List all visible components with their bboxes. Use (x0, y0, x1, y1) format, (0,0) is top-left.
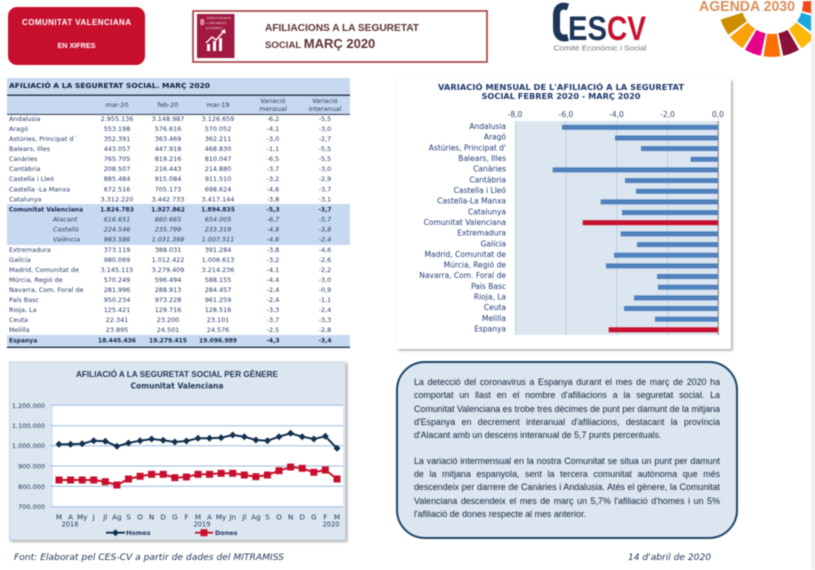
row: Castella i Lleó: 911.510 (205, 175, 231, 183)
row: Astúries: 352.391 (104, 135, 130, 143)
category labels: Galícia (481, 239, 506, 248)
row: Aragó: 570.052 (205, 125, 231, 133)
commentary paragraph 2: La variació intermensual en la nostra Comunitat se situa un punt per damunt (414, 456, 720, 466)
row: Castelló (53, 226, 331, 234)
row: Canàries: 810.047 (205, 155, 231, 163)
row: València: 983.586 (104, 236, 130, 244)
row: Melilla: 24.501 (157, 326, 179, 334)
axis labels: -6,0 (559, 110, 574, 119)
x axis labels: D (299, 512, 305, 522)
row: País Basc: 950.234 (104, 296, 130, 304)
row: Espanya: -4,3 (266, 338, 280, 344)
row: Navarra: Navarra, Com. Foral de (9, 286, 83, 294)
row: Alacant: -6,7 (267, 216, 280, 224)
row: Múrcia (9, 276, 331, 284)
panel: affiliation table (7, 78, 350, 348)
row: València (53, 236, 331, 244)
x axis labels: O (276, 512, 282, 522)
commentary panel background (397, 362, 737, 538)
plot area (50, 405, 343, 507)
chart title: Comunitat Valenciana (130, 382, 224, 390)
y axis labels: 1.200.000 (12, 402, 45, 410)
row: Castelló: 235.799 (155, 226, 181, 234)
logo: CES CV: ES (568, 10, 607, 48)
commentary paragraph 1: d'Alacant amb un descens interanual de 5,7 punts percentuals. (414, 430, 661, 440)
row: Castella i Lleó: 885.484 (104, 175, 130, 183)
row: Múrcia: -3,0 (319, 276, 331, 284)
y axis labels: 1.100.000 (12, 422, 45, 430)
commentary paragraph 1: Comunitat Valenciana es trobe tres dècimes de punt per damunt de la mitjana (414, 404, 720, 414)
row: Madrid: -2,2 (319, 266, 331, 274)
row: Rioja: 128.516 (205, 306, 231, 314)
row: Castella-La Manxa: -3,7 (319, 186, 331, 194)
row: Extremadura: Extremadura (9, 246, 51, 254)
row: Aragó: 553.198 (104, 125, 130, 133)
x axis labels: Jn (228, 512, 236, 522)
row: Galícia: 1.012.422 (152, 256, 184, 264)
commentary paragraph 1 (414, 377, 721, 440)
row: Canàries (9, 155, 331, 163)
y axis labels: 700.000 (18, 503, 45, 511)
row: Castella i Lleó: Castella i Lleó (9, 175, 54, 183)
category labels: Cantàbria (469, 175, 506, 184)
y axis labels: 800.000 (18, 483, 45, 491)
row: Rioja: -2,4 (319, 306, 331, 314)
row: Astúries: 362.211 (205, 135, 231, 143)
plot area (515, 121, 719, 335)
row: Comunitat Valenciana: -5,3 (266, 206, 280, 214)
row: Madrid: 3.214.236 (202, 266, 234, 274)
row: Ceuta: 23.101 (207, 316, 229, 324)
row: Castelló: -3,8 (319, 226, 331, 234)
row: Galícia: 980.069 (104, 256, 130, 264)
category labels (419, 122, 506, 334)
commentary paragraph 2 (414, 456, 720, 520)
row: País Basc (9, 296, 331, 304)
row: Andalusia: 3.148.987 (152, 115, 184, 123)
row: Balears: Balears, Illes (9, 145, 51, 153)
row: Balears: -1,1 (267, 145, 279, 153)
x axis labels: J (92, 512, 95, 522)
badge: Comunitat Valenciana en xifres: EN XIFRES (58, 41, 96, 50)
category labels: Aragó (484, 133, 506, 142)
row: Ceuta: 22.341 (106, 316, 128, 324)
row: Navarra: -0,9 (319, 286, 331, 294)
row: Castelló: -4,8 (267, 226, 279, 234)
axis labels: -8,0 (508, 110, 523, 119)
x axis labels: F (184, 512, 188, 522)
x axis labels: Ag (112, 512, 122, 522)
logo: CES CV: CV (607, 10, 646, 48)
row: Andalusia: -5,5 (319, 115, 331, 123)
x axis labels: 2019 (194, 520, 210, 528)
row: Rioja: Rioja, La (9, 306, 37, 314)
category labels: Múrcia, Regió de (444, 261, 506, 270)
x axis labels: M (195, 512, 201, 522)
commentary paragraph 1: La detecció del coronavirus a Espanya durant el mes de març de 2020 ha (414, 377, 720, 387)
row: Galícia: 1.006.613 (202, 256, 234, 264)
icon: SDG 8 decent work (197, 14, 234, 58)
row: Espanya: Espanya (9, 338, 37, 344)
title text (265, 23, 420, 51)
row: Catalunya: -3,8 (267, 196, 279, 204)
row: Extremadura: -3,8 (267, 246, 279, 254)
row: Madrid: Madrid, Comunitat de (9, 266, 79, 274)
chart title: SOCIAL FEBRER 2020 - MARÇ 2020 (482, 92, 641, 101)
x axis labels: S (126, 512, 131, 522)
row: Espanya: -3,4 (318, 338, 332, 344)
x axis labels: Ag (251, 512, 261, 522)
row: Alacant: Alacant (52, 216, 78, 224)
row: Navarra: 281.996 (104, 286, 130, 294)
category labels: Comunitat Valenciana (424, 218, 506, 227)
row: Astúries: Astúries, Principat d´ (9, 135, 77, 143)
row: Aragó: -4,1 (267, 125, 279, 133)
series: Homes (59, 433, 337, 448)
x axis labels: N (288, 512, 293, 522)
icon: SDG 8 decent work: TRABAJO DECENTE (206, 16, 231, 20)
row: Melilla (9, 326, 331, 334)
chart title: VARIACIÓ MENSUAL DE L'AFILIACIÓ A LA SEGURETAT (438, 83, 685, 92)
category labels: Astúries, Principat d' (429, 143, 506, 152)
row: Andalusia: -6,2 (267, 115, 279, 123)
row: Balears: 443.057 (104, 145, 130, 153)
row: Extremadura (9, 246, 331, 254)
x axis labels: D (160, 512, 166, 522)
row: Navarra: 288.913 (155, 286, 181, 294)
row: Canàries: 819.216 (155, 155, 181, 163)
category labels: Ceuta (484, 303, 506, 312)
table header: Variació (260, 97, 286, 105)
row: Castella-La Manxa: 698.624 (205, 186, 231, 194)
x axis labels: F (323, 512, 327, 522)
category labels: Castella i Lleó (454, 186, 506, 195)
row: València: València (53, 236, 80, 244)
row: Múrcia: Múrcia, Regió de (9, 276, 63, 284)
table header: Variació (312, 97, 338, 105)
commentary paragraph 2: l'afiliació de dones respecte al mes anterior. (414, 509, 586, 519)
row: Extremadura: 391.284 (205, 246, 231, 254)
axis labels: -4,0 (609, 110, 624, 119)
row: Castella i Lleó: -3,2 (267, 175, 279, 183)
category labels: Melilla (482, 314, 506, 323)
chart title (438, 83, 685, 101)
x axis labels: 2020 (323, 520, 339, 528)
row: Catalunya: 3.417.144 (202, 196, 234, 204)
row: València: 1.031.398 (152, 236, 184, 244)
source note: Font: Elaborat pel CES-CV a partir de dades del MITRAMISS (14, 553, 284, 563)
x axis labels (56, 512, 340, 528)
panel: monthly variation bar chart (397, 79, 731, 349)
row: Ceuta (9, 316, 331, 324)
row: País Basc: País Basc (9, 296, 39, 304)
commentary paragraph 2: Valenciana descendeix el mes de març un 5,7% l'afiliació d'homes i un 5% (414, 496, 720, 506)
row: Galícia: Galícia (9, 256, 31, 264)
y axis labels: 1.000.000 (12, 442, 45, 450)
icon: SDG 8 decent work: Y CRECIMIENTO (206, 21, 227, 25)
row: Extremadura: 388.031 (155, 246, 181, 254)
row: Cantàbria: 214.880 (205, 165, 231, 173)
row: Cantàbria: 216.443 (155, 165, 181, 173)
row: Castella-La Manxa: -4,6 (267, 186, 279, 194)
row: Catalunya (9, 196, 331, 204)
row: Canàries: Canàries (9, 155, 38, 163)
category labels: País Basc (471, 282, 506, 291)
row: Aragó: -3,0 (319, 125, 331, 133)
category labels: Andalusia (469, 122, 506, 131)
row: Andalusia (9, 115, 331, 123)
row: Múrcia: 588.155 (205, 276, 231, 284)
category labels: Rioja, La (474, 293, 506, 302)
x axis labels: G (311, 512, 317, 522)
x axis labels: N (149, 512, 154, 522)
row: Astúries (9, 135, 331, 143)
commentary paragraph 1: d'Espanya en decrement interanual d'afiliacions, destacant la província (414, 417, 720, 427)
x axis labels: G (172, 512, 178, 522)
row: Alacant: 660.665 (155, 216, 181, 224)
row: Balears: 468.830 (205, 145, 231, 153)
row: Madrid (9, 266, 331, 274)
row: Castelló: 224.546 (104, 226, 130, 234)
row: Comunitat Valenciana: 1.927.862 (151, 206, 185, 214)
x axis labels: My (77, 512, 88, 522)
row: Balears: 447.918 (155, 145, 181, 153)
panel: affiliation by gender line chart (10, 362, 346, 540)
row: Aragó (9, 125, 331, 133)
row: Madrid: -4,1 (267, 266, 279, 274)
row: Comunitat Valenciana: 1.824.783 (100, 206, 134, 214)
x axis labels: 2018 (62, 520, 78, 528)
logo: CES CV: Comité Econòmic i Social (554, 44, 647, 52)
row: Galícia: -3,2 (267, 256, 279, 264)
row: Navarra: 284.457 (205, 286, 231, 294)
logo: CES CV (554, 6, 647, 52)
row: Melilla: -2,5 (267, 326, 279, 334)
axis labels (508, 110, 724, 119)
logo: Agenda 2030 (699, 0, 815, 57)
table header: mensual (259, 105, 287, 113)
row: Castella-La Manxa: 705.173 (155, 186, 181, 194)
row: València: -4,6 (267, 236, 279, 244)
row: Castella i Lleó (9, 175, 331, 183)
table header: mar-19 (207, 101, 229, 109)
row: Espanya: 19.279.415 (149, 338, 187, 344)
category labels: Espanya (474, 324, 506, 334)
axis labels: 0,0 (712, 110, 724, 119)
row: Rioja (9, 306, 331, 314)
category labels: Extremadura (457, 229, 506, 238)
row: Ceuta: Ceuta (9, 316, 28, 324)
row: Navarra (9, 286, 331, 294)
row: País Basc: -2,4 (267, 296, 279, 304)
chart title (76, 368, 278, 390)
legend: Dones (215, 529, 238, 537)
y axis labels: 900.000 (18, 462, 45, 470)
series: Dones (59, 467, 337, 485)
row: Alacant: 654.005 (205, 216, 231, 224)
axis labels: -2,0 (660, 110, 675, 119)
row: Ceuta: -3,3 (319, 316, 331, 324)
row: Castelló: Castelló (53, 226, 79, 234)
row: Múrcia: 596.494 (155, 276, 181, 284)
row: Catalunya: -3,1 (319, 196, 331, 204)
commentary paragraph 2: descendeix per darrere de Canàries i Andalusia. Atés el gènere, la Comunitat (414, 482, 720, 492)
row: Canàries: -6,5 (267, 155, 279, 163)
row: Astúries: 363.469 (155, 135, 181, 143)
icon: SDG wheel (720, 0, 815, 57)
row: Melilla: -2,8 (319, 326, 331, 334)
y axis labels (12, 402, 45, 511)
row: Comunitat Valenciana (9, 206, 332, 214)
row: Canàries: 765.705 (104, 155, 130, 163)
row: Balears (9, 145, 331, 153)
x axis labels: M (56, 512, 62, 522)
row: Espanya: 18.445.436 (98, 338, 136, 344)
date: 14 d'abril de 2020 (628, 553, 711, 563)
row: Cantàbria: -3,0 (319, 165, 331, 173)
x axis labels: A (207, 512, 212, 522)
row: Andalusia: 3.126.659 (202, 115, 234, 123)
title box (193, 11, 487, 62)
x axis labels: My (216, 512, 227, 522)
row: Castella i Lleó: -2,9 (319, 175, 331, 183)
row: Cantàbria (9, 165, 331, 173)
category labels: Navarra, Com. Foral de (419, 271, 506, 280)
row: Extremadura: -4,6 (319, 246, 331, 254)
table header (106, 97, 342, 113)
row: Ceuta: -3,7 (267, 316, 279, 324)
row: Melilla: Melilla (9, 326, 30, 334)
commentary paragraph 2: de la mitjana espanyola, sent la tercera comunitat autònoma que més (414, 469, 720, 479)
icon: SDG 8 decent work: 8 (200, 18, 205, 27)
category labels: Balears, Illes (458, 154, 506, 163)
row: Comunitat Valenciana: -3,7 (318, 206, 332, 214)
category labels: Catalunya (468, 207, 506, 216)
row: Castella i Lleó: 915.084 (155, 175, 181, 183)
row: País Basc: 973.228 (155, 296, 181, 304)
row: Espanya (9, 338, 332, 344)
x axis labels: M (334, 512, 340, 522)
row: Cantàbria: Cantàbria (9, 165, 41, 173)
x axis labels: Jl (102, 512, 107, 522)
row: Alacant (52, 216, 332, 224)
row: Aragó: 576.616 (155, 125, 181, 133)
row: Melilla: 23.895 (106, 326, 128, 334)
table header: mar-20 (106, 101, 128, 109)
row: València: -2,4 (319, 236, 331, 244)
row: Cantàbria: 208.507 (104, 165, 130, 173)
row: Ceuta: 23.200 (157, 316, 179, 324)
row: Alacant: 616.651 (104, 216, 130, 224)
row: Balears: -5,5 (319, 145, 331, 153)
row: Extremadura: 373.119 (104, 246, 130, 254)
row: Múrcia: -4,4 (267, 276, 279, 284)
row: Catalunya: Catalunya (9, 196, 42, 204)
legend (106, 529, 238, 537)
row: Navarra: -2,4 (267, 286, 279, 294)
category labels: Madrid, Comunitat de (425, 250, 506, 259)
badge: Comunitat Valenciana en xifres: COMUNITAT VALENCIANA (22, 18, 131, 27)
category labels: Castella-La Manxa (437, 197, 506, 206)
x axis labels: O (137, 512, 143, 522)
row: Castella-La Manxa: Castella -La Manxa (9, 186, 70, 194)
row: Astúries: -3,0 (267, 135, 279, 143)
row: Cantàbria: -3,7 (267, 165, 279, 173)
row: Melilla: 24.576 (207, 326, 229, 334)
row: Andalusia: Andalusia (9, 115, 41, 123)
chart title: AFILIACIÓ A LA SEGURETAT SOCIAL PER GÈNERE (76, 368, 278, 379)
row: Castelló: 233.319 (205, 226, 231, 234)
row: Canàries: -5,5 (319, 155, 331, 163)
row: País Basc: -1,1 (319, 296, 331, 304)
row: Alacant: -5,7 (319, 216, 332, 224)
table header: feb-20 (158, 101, 178, 109)
row: Castella-La Manxa: 672.516 (104, 186, 130, 194)
row: Aragó: Aragó (9, 125, 28, 133)
icon: SDG 8 decent work: ECONÓMICO (206, 25, 222, 30)
row: País Basc: 961.259 (205, 296, 231, 304)
title text: SOCIAL MARÇ 2020 (265, 36, 375, 51)
commentary paragraph 1: comportat un llast en el nombre d'afiliacions a la seguretat social. La (414, 390, 720, 400)
row: Espanya: 19.096.989 (199, 338, 237, 344)
table title: AFILIACIÓ A LA SEGURETAT SOCIAL. MARÇ 2020 (9, 81, 210, 90)
x axis labels: Jl (241, 512, 246, 522)
row: Madrid: 3.145.115 (101, 266, 133, 274)
table header: interanual (309, 105, 342, 113)
row: Comunitat Valenciana: 1.894.835 (201, 206, 235, 214)
x axis labels: A (68, 512, 73, 522)
legend: Homes (126, 529, 151, 537)
badge: Comunitat Valenciana en xifres (8, 7, 145, 65)
x axis labels: S (265, 512, 270, 522)
row: Rioja: 129.716 (155, 306, 181, 314)
row: Rioja: 125.421 (104, 306, 130, 314)
row: Galícia: -2,6 (319, 256, 331, 264)
row: Galícia (9, 256, 331, 264)
row: Astúries: -2,7 (319, 135, 331, 143)
row: Catalunya: 3.442.733 (152, 196, 184, 204)
row: Múrcia: 570.249 (104, 276, 130, 284)
row: Castella-La Manxa (9, 186, 331, 194)
bars (553, 125, 718, 332)
title text: AFILIACIONS A LA SEGURETAT (265, 23, 420, 34)
row: Andalusia: 2.955.136 (101, 115, 133, 123)
row: Catalunya: 3.312.220 (101, 196, 133, 204)
category labels: Canàries (473, 165, 506, 174)
row: Rioja: -3,3 (267, 306, 279, 314)
row: Madrid: 3.279.409 (152, 266, 184, 274)
row: València: 1.007.511 (202, 236, 234, 244)
row: Comunitat Valenciana: Comunitat Valenciana (9, 206, 83, 214)
